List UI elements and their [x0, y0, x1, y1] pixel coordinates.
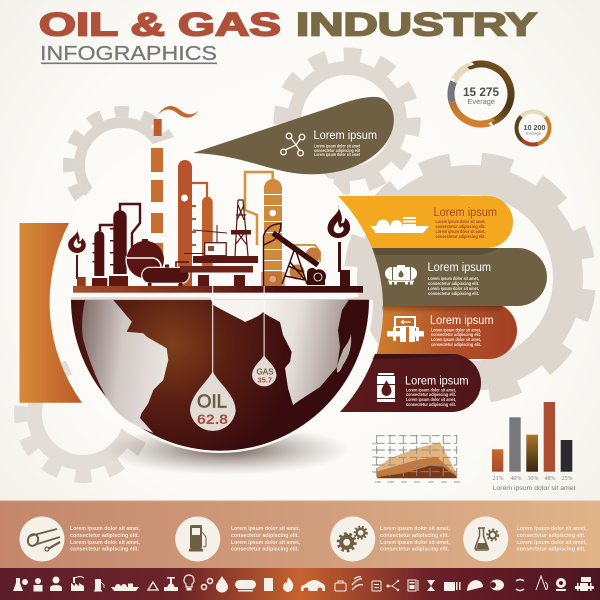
bar chart [492, 402, 576, 492]
area chart: 2010 [414, 480, 420, 484]
area chart: 2000 [401, 480, 407, 484]
right flare [328, 205, 350, 286]
pumpjack [264, 224, 326, 286]
body text: Lorem ipsum dolor sit amet, [431, 337, 481, 342]
feature: pipes: Lorem ipsum dolor sit amet, [70, 526, 141, 532]
donut: 15 275: Everage [468, 97, 495, 106]
banner: yellow [338, 196, 513, 248]
icon: valve [387, 317, 424, 342]
title: INDUSTRY [296, 6, 537, 42]
feature: pipes [20, 516, 141, 562]
body text: Lorem ipsum dolor sit amet, [431, 328, 481, 332]
bar chart: 48% [544, 476, 556, 482]
globe shadow [101, 425, 351, 475]
body text: consectetur adipiscing elit. [406, 392, 456, 397]
feature: flask [463, 516, 587, 562]
bubble text: Lorem ipsum dolor sit amet [314, 152, 360, 157]
area chart: 2040 [454, 480, 460, 484]
feature: gears: consectetur adipiscing elit. [380, 546, 450, 552]
bottom band [0, 500, 600, 568]
heading: Lorem ipsum [405, 376, 468, 388]
icon: network [281, 133, 305, 156]
gear: large right [340, 148, 600, 408]
icon: lng ship [371, 217, 429, 233]
donut: 15 275: 15 275 [463, 85, 499, 99]
globe [71, 300, 369, 451]
feature: fuel pump: consectetur adipiscing elit. [231, 546, 300, 552]
area chart: 5000 [372, 470, 378, 474]
area chart: 6000 [372, 463, 378, 467]
refinery [68, 106, 363, 299]
feature: pipes: Lorem ipsum dolor sit amet, [70, 540, 141, 546]
bubble heading: Lorem ipsum [314, 130, 377, 142]
heading: Lorem ipsum [430, 315, 494, 327]
feature: flask: Lorem ipsum dolor sit amet, [517, 526, 587, 532]
heading: Lorem ipsum [434, 207, 497, 219]
gas drop: GAS [256, 367, 274, 376]
offshore platform [180, 200, 258, 286]
banner: rust [375, 302, 517, 359]
bar chart: 30% [528, 476, 538, 482]
bubble text: Lorem ipsum dolor sit amet [314, 144, 360, 148]
oil drop: OIL [197, 392, 227, 412]
banner: maroon [340, 354, 481, 412]
body text: Lorem ipsum dolor sit amet, [406, 397, 456, 402]
smoke bubble [193, 97, 394, 174]
body text: Lorem ipsum dolor sit amet, [428, 276, 479, 281]
area chart: 2020 [428, 480, 434, 484]
oil drop [190, 273, 236, 431]
body text: consectetur adipiscing elit. [436, 234, 486, 239]
body text: consectetur adipiscing elit. [428, 281, 479, 286]
icon: barrel [377, 373, 395, 402]
body text: Lorem ipsum dolor sit amet, [436, 229, 486, 234]
chimney [151, 106, 198, 263]
gear: upper left [62, 105, 182, 225]
body text [436, 219, 486, 239]
feature: flask: consectetur adipiscing elit. [517, 546, 586, 552]
body text: consectetur adipiscing elit. [431, 342, 481, 347]
icon: rail tank [385, 265, 417, 284]
title [39, 6, 537, 42]
donut: 10 200 [510, 105, 556, 151]
body text [431, 328, 481, 347]
globe halo [67, 300, 373, 453]
horizontal tank [142, 262, 189, 286]
feature: gears: consectetur adipiscing elit. [380, 533, 450, 539]
feature: fuel pump: Lorem ipsum dolor sit amet, [231, 526, 301, 532]
bar chart: 21% [492, 476, 504, 482]
feature: gears: Lorem ipsum dolor sit amet, [380, 526, 451, 532]
body text [406, 388, 456, 407]
area chart: 1990 [388, 480, 394, 484]
gas drop [252, 286, 276, 386]
feature: gears: Lorem ipsum dolor sit amet, [380, 540, 451, 546]
madagascar [337, 334, 351, 373]
bar chart: 40% [510, 476, 522, 482]
subtitle: INFOGRAPHICS [40, 42, 217, 65]
feature: fuel pump [175, 516, 301, 562]
banner: olive [372, 248, 547, 306]
gas drop: 35.7 [258, 378, 272, 384]
white disc behind refinery [52, 132, 378, 458]
bar chart: Lorem ipsum dolor sit amet [492, 485, 576, 492]
gold column and pipe [245, 172, 320, 286]
feature: flask: Lorem ipsum dolor sit amet, [517, 540, 587, 546]
oil drop: 62.8 [197, 412, 229, 427]
continent: south america [82, 300, 168, 433]
body text [428, 276, 479, 296]
area chart: 2030 [441, 480, 447, 484]
gear: lower left [13, 344, 153, 484]
feature: pipes: consectetur adipiscing elit. [70, 533, 140, 539]
left flare [68, 228, 86, 286]
gear: top centre [278, 52, 416, 190]
area chart: 1980 [375, 480, 381, 484]
area chart: 8000 [372, 448, 378, 452]
donut: 10 200: Everage [526, 132, 541, 136]
heading: Lorem ipsum [428, 262, 491, 274]
area chart: 7000 [372, 455, 378, 459]
body text: consectetur adipiscing elit. [436, 224, 486, 229]
body text: consectetur adipiscing elit. [428, 291, 479, 296]
icon strip [0, 568, 600, 600]
refinery base [73, 286, 363, 293]
continent: africa [211, 300, 349, 405]
body text: Lorem ipsum dolor sit amet, [406, 388, 456, 392]
maroon columns [92, 204, 140, 286]
donut: 15 275 [441, 54, 521, 134]
bubble text [314, 144, 361, 157]
feature: fuel pump: consectetur adipiscing elit. [231, 533, 300, 539]
body text: Lorem ipsum dolor sit amet, [428, 286, 479, 291]
orange cooling tower shape [20, 223, 82, 403]
feature: pipes: consectetur adipiscing elit. [70, 546, 140, 552]
sphere tank [126, 239, 164, 278]
area chart [372, 435, 460, 484]
bar chart: 25% [562, 476, 572, 482]
body text: Lorem ipsum dolor sit amet, [436, 219, 486, 224]
area chart: 9000 [372, 442, 378, 446]
feature: flask: consectetur adipiscing elit. [517, 533, 586, 539]
feature: gears [330, 516, 451, 562]
body text: consectetur adipiscing elit. [406, 402, 456, 407]
body text: consectetur adipiscing elit. [431, 332, 481, 337]
title: OIL & GAS [39, 6, 281, 42]
feature: fuel pump: Lorem ipsum dolor sit amet, [231, 540, 301, 546]
rust columns [178, 160, 213, 286]
donut: 10 200: 10 200 [524, 125, 546, 132]
bubble text: consectetur adipiscing elit [314, 148, 361, 153]
